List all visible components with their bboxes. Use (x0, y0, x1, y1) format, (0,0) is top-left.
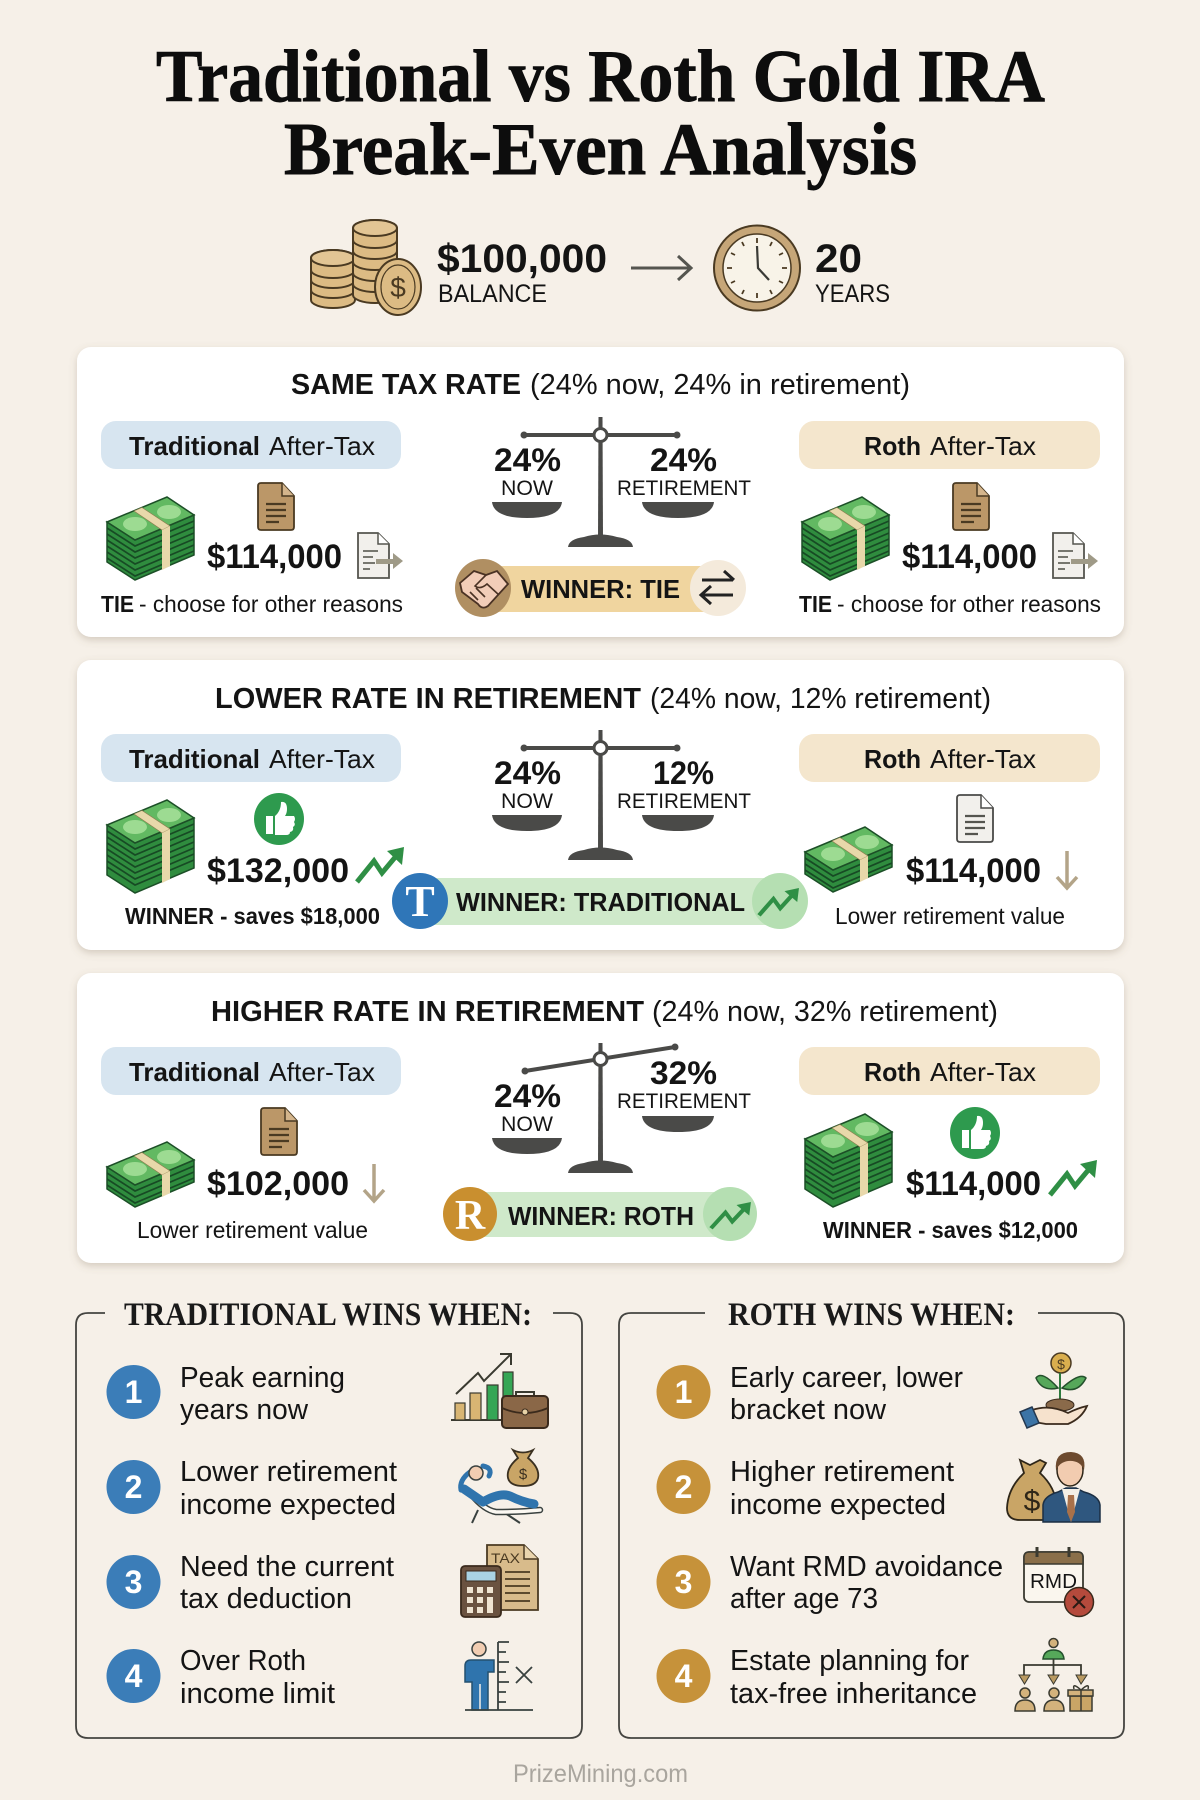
card background (77, 660, 1124, 950)
icon: swap arrows (701, 571, 734, 604)
icon: calculator and tax form: TAX (491, 1550, 521, 1566)
item 1: bracket now (730, 1394, 887, 1426)
item 1: years now (180, 1394, 309, 1426)
icon: document (261, 1108, 297, 1155)
icon: down arrow (1057, 851, 1077, 888)
icon: cash stack (802, 497, 889, 580)
box outline (76, 1313, 582, 1738)
card background (77, 347, 1124, 637)
roth pill: After-Tax (930, 431, 1036, 461)
item 1 (106, 1362, 345, 1426)
item 3 (106, 1551, 394, 1615)
heading: (24% now, 24% in retirement) (530, 369, 910, 401)
heading (211, 996, 998, 1028)
roth amount: $114,000 (902, 538, 1037, 576)
icon: short cash stack (107, 1142, 194, 1207)
icon: inheritance tree (1015, 1638, 1093, 1711)
balance scale: RETIREMENT (617, 477, 751, 500)
balance scale: 24% (494, 755, 561, 791)
roth pill: Roth (864, 1057, 921, 1087)
roth pill: After-Tax (930, 1057, 1036, 1087)
roth caption: Lower retirement value (835, 903, 1065, 929)
icon: short cash stack (805, 827, 892, 892)
winner badge: tie: WINNER: TIE (521, 574, 680, 604)
heading: LOWER RATE IN RETIREMENT (215, 683, 641, 715)
icon: handshake (460, 571, 508, 608)
traditional pill: Traditional (129, 1057, 260, 1087)
item 4: 4 (675, 1658, 693, 1694)
summary row: balance and years (311, 220, 890, 315)
traditional amount: $132,000 (207, 852, 349, 890)
roth amount: $114,000 (906, 852, 1041, 890)
winner badge: traditional: T (405, 877, 435, 926)
icon: down arrow (364, 1164, 384, 1201)
icon: document (953, 483, 989, 530)
heading (215, 683, 991, 715)
item 2: 2 (125, 1469, 142, 1505)
traditional pill: After-Tax (269, 1057, 375, 1087)
winner badge: tie (455, 559, 746, 617)
balance scale: 12% (653, 755, 714, 791)
item 2: income expected (180, 1489, 396, 1521)
winner badge: traditional: WINNER: TRADITIONAL (456, 887, 745, 917)
balance figure (437, 237, 607, 308)
icon: document arrow (1053, 533, 1098, 578)
traditional pill: Traditional (129, 744, 260, 774)
traditional caption: Lower retirement value (137, 1217, 368, 1243)
balance scale tilted: 32% (650, 1055, 717, 1091)
icon: clock (714, 226, 800, 310)
item 3: tax deduction (180, 1583, 352, 1615)
icon: plant in hand (1020, 1353, 1087, 1428)
balance scale (492, 730, 751, 860)
icon: relaxing retiree: $ (519, 1466, 528, 1483)
traditional pill (101, 734, 401, 782)
traditional pill: Traditional (129, 431, 260, 461)
item 1: Peak earning (180, 1362, 345, 1394)
icon: person at income limit (465, 1642, 533, 1710)
balance figure: BALANCE (438, 280, 547, 308)
winner badge: traditional (392, 873, 808, 929)
years figure (815, 237, 890, 308)
balance figure: $100,000 (437, 237, 607, 281)
balance scale: 24% (650, 442, 717, 478)
item 4: 4 (125, 1658, 143, 1694)
icon: chart and briefcase (451, 1354, 548, 1428)
roth pill: Roth (864, 431, 921, 461)
box outline (619, 1313, 1124, 1738)
heading: HIGHER RATE IN RETIREMENT (211, 996, 644, 1028)
icon: cash stack (107, 497, 194, 580)
item 1: 1 (675, 1374, 692, 1410)
traditional pill (101, 1047, 401, 1095)
item 3: Want RMD avoidance (730, 1551, 1003, 1583)
arrow (631, 256, 691, 280)
roth pill (799, 1047, 1100, 1095)
item 3: 3 (125, 1564, 142, 1600)
item 2 (656, 1456, 954, 1521)
roth pill: Roth (864, 744, 921, 774)
icon: trend up (357, 847, 404, 882)
balance scale (492, 417, 751, 547)
roth caption: TIE (799, 591, 832, 617)
icon: RMD calendar: RMD (1030, 1571, 1077, 1593)
icon: thumbs up (254, 793, 304, 845)
panel: higher rate in retirement (77, 973, 1124, 1263)
panel: traditional wins when (76, 1297, 582, 1738)
icon: gold coins (311, 220, 421, 315)
title: Break-Even Analysis (284, 109, 917, 191)
traditional caption: WINNER - saves $18,000 (125, 903, 380, 929)
icon: relaxing retiree (461, 1450, 540, 1523)
winner badge: roth: R (455, 1193, 486, 1239)
icon: gold coins: $ (390, 272, 406, 303)
icon: plant in hand: $ (1057, 1356, 1065, 1372)
icon: tall cash stack (805, 1114, 892, 1207)
years figure: 20 (815, 237, 862, 281)
item 4: income limit (180, 1678, 335, 1710)
roth caption: WINNER - saves $12,000 (823, 1217, 1078, 1243)
panel: roth wins when (619, 1297, 1124, 1738)
item 4: Estate planning for (730, 1645, 969, 1677)
balance scale: RETIREMENT (617, 790, 751, 813)
balance scale tilted: 24% (494, 1078, 561, 1114)
balance scale: 24% (494, 442, 561, 478)
traditional amount: $114,000 (207, 538, 342, 576)
icon: trend up (711, 1202, 751, 1228)
title: Traditional vs Roth Gold IRA (156, 36, 1045, 118)
item 1 (656, 1362, 963, 1426)
item 2: Lower retirement (180, 1456, 397, 1488)
icon: trend up (759, 888, 799, 915)
item 4 (106, 1645, 335, 1710)
icon: white document (957, 795, 993, 842)
traditional pill: After-Tax (269, 431, 375, 461)
icon: document (258, 483, 294, 530)
roth pill: After-Tax (930, 744, 1036, 774)
icon: document arrow (358, 533, 403, 578)
roth caption: - choose for other reasons (837, 591, 1101, 617)
traditional pill (101, 421, 401, 469)
title (156, 36, 1045, 191)
roth amount: $114,000 (906, 1165, 1041, 1203)
item 2: Higher retirement (730, 1456, 954, 1488)
balance scale tilted: RETIREMENT (617, 1090, 751, 1113)
item 1: 1 (125, 1374, 142, 1410)
item 3: 3 (675, 1564, 692, 1600)
item 3: after age 73 (730, 1583, 878, 1615)
item 4: tax-free inheritance (730, 1678, 977, 1710)
years figure: YEARS (815, 280, 890, 308)
balance scale: NOW (501, 477, 553, 500)
item 3 (656, 1551, 1003, 1615)
icon: money bag and professional (1007, 1452, 1100, 1522)
balance scale tilted (492, 1043, 751, 1173)
roth pill (799, 734, 1100, 782)
traditional caption: TIE (101, 591, 134, 617)
icon: trend up (1050, 1160, 1097, 1195)
panel: lower rate in retirement (77, 660, 1124, 950)
item 2: 2 (675, 1469, 692, 1505)
roth pill (799, 421, 1100, 469)
winner badge: roth: WINNER: ROTH (508, 1201, 694, 1231)
card background (77, 973, 1124, 1263)
item 1: Early career, lower (730, 1362, 963, 1394)
icon: tall cash stack (107, 800, 194, 893)
winner badge: roth (443, 1187, 757, 1241)
heading: ROTH WINS WHEN: (728, 1297, 1015, 1333)
icon: RMD calendar (1024, 1547, 1094, 1616)
heading: TRADITIONAL WINS WHEN: (124, 1297, 532, 1333)
icon: thumbs up (950, 1107, 1000, 1159)
item 2: income expected (730, 1489, 946, 1521)
heading: (24% now, 32% retirement) (652, 996, 998, 1028)
footer watermark: PrizeMining.com (513, 1760, 688, 1788)
heading: (24% now, 12% retirement) (650, 683, 991, 715)
traditional caption: - choose for other reasons (139, 591, 403, 617)
item 2 (106, 1456, 397, 1521)
item 4: Over Roth (180, 1645, 306, 1677)
traditional pill: After-Tax (269, 744, 375, 774)
panel: same tax rate (77, 347, 1124, 637)
item 3: Need the current (180, 1551, 394, 1583)
traditional amount: $102,000 (207, 1165, 349, 1203)
heading (291, 369, 910, 401)
balance scale: NOW (501, 790, 553, 813)
icon: calculator and tax form (461, 1545, 538, 1617)
item 4 (656, 1645, 977, 1710)
balance scale tilted: NOW (501, 1113, 553, 1136)
icon: money bag and professional: $ (1024, 1485, 1041, 1518)
heading: SAME TAX RATE (291, 369, 521, 401)
